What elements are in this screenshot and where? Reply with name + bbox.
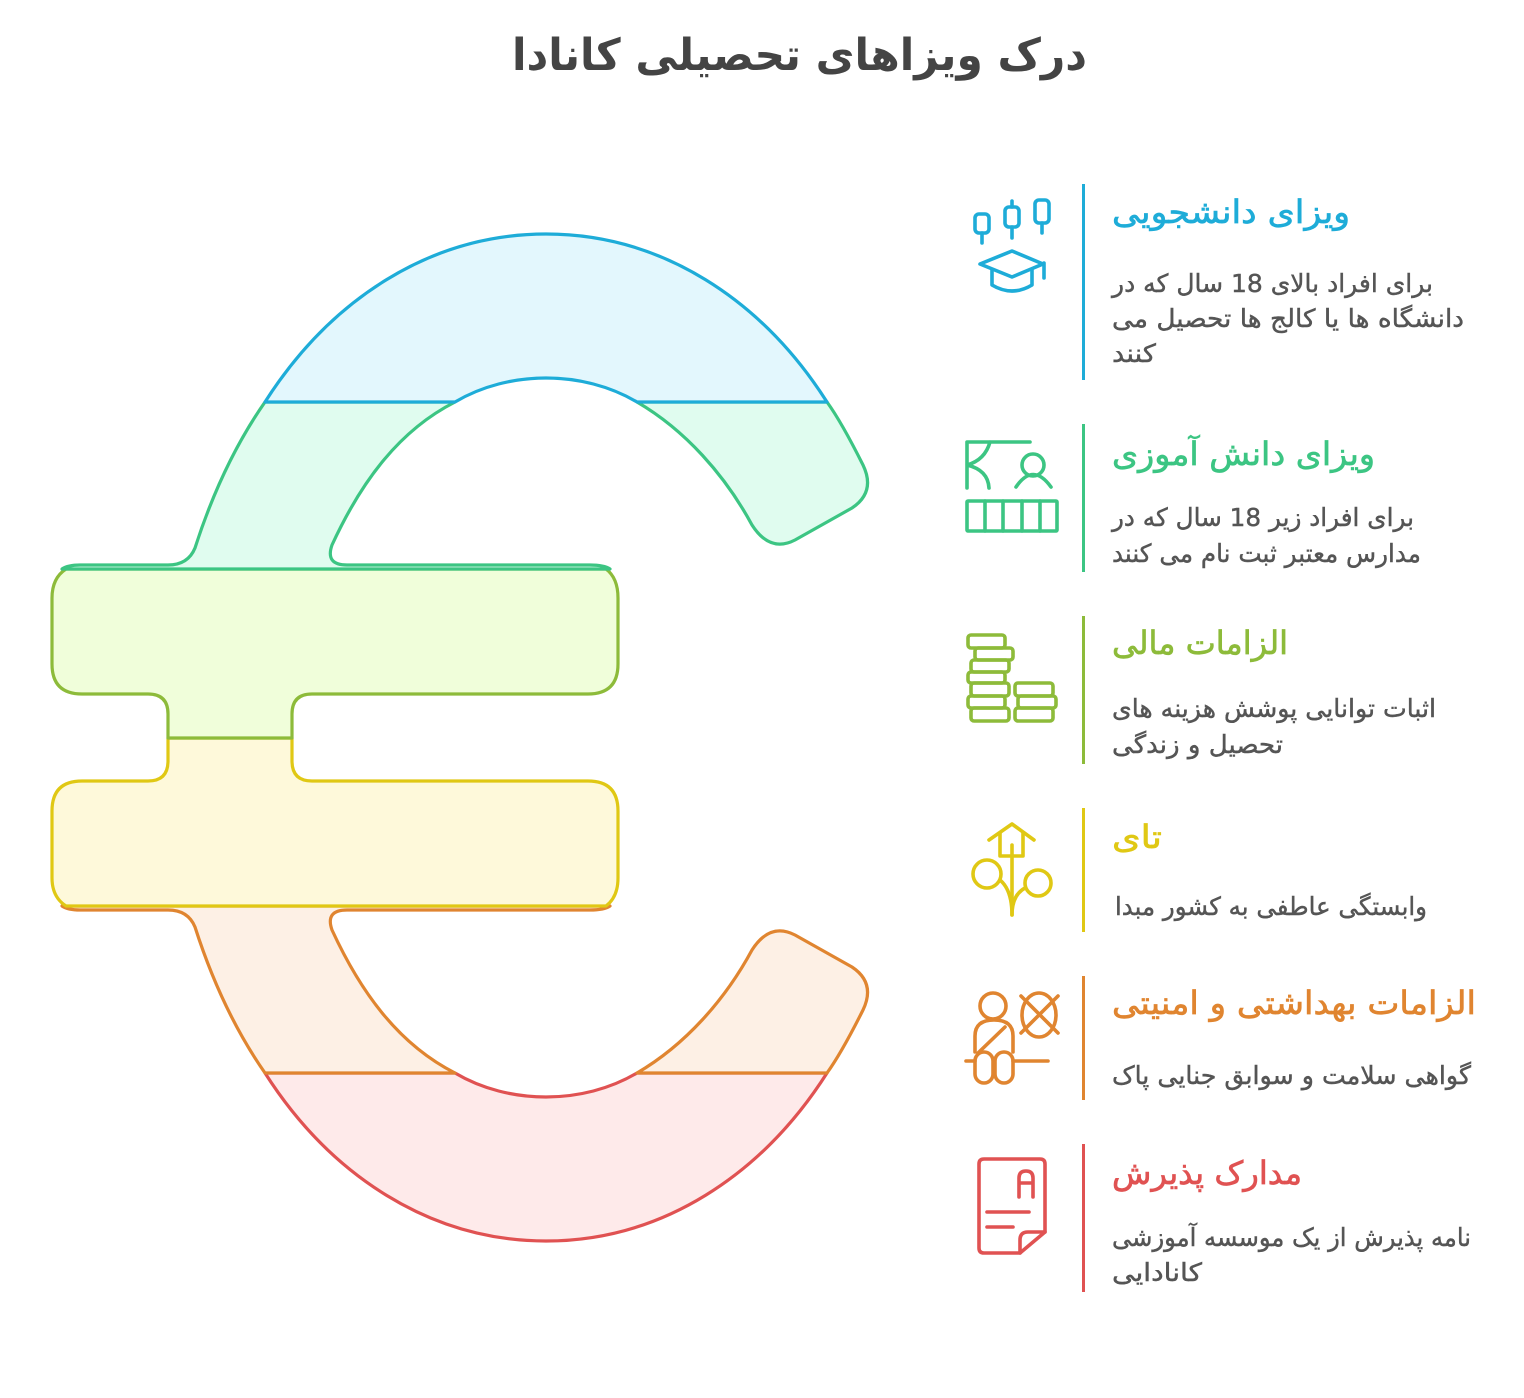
panel: school visa — [967, 424, 1421, 572]
icon: coin stacks — [968, 635, 1056, 721]
text: student visa description: کنند — [1112, 339, 1156, 368]
text: school visa description — [1110, 503, 1421, 568]
icon: seated person with crossed circle — [966, 993, 1058, 1083]
euro segment: admission documents (red) — [265, 1073, 827, 1241]
euro segment: health and security (orange) — [62, 906, 868, 1073]
panel: health and security requirements — [966, 976, 1476, 1100]
divider: financial requirements — [1082, 616, 1085, 764]
text: school visa description: برای افراد زیر 18 سال که در — [1110, 503, 1414, 532]
euro segment: financial requirements (lime) — [52, 569, 618, 738]
heading: admission documents: مدارک پذیرش — [1112, 1154, 1302, 1192]
icon: house on branching tree — [973, 824, 1051, 915]
text: ties description: وابستگی عاطفی به کشور مبدا — [1115, 892, 1427, 922]
divider: health and security — [1082, 976, 1085, 1100]
text: student visa description — [1110, 269, 1464, 368]
icon: graded document — [979, 1159, 1045, 1253]
euro segment: school visa (green) — [62, 402, 868, 569]
divider: admission documents — [1082, 1144, 1085, 1292]
icon: candlesticks and graduation cap — [975, 200, 1049, 291]
heading: financial requirements: الزامات مالی — [1112, 624, 1288, 662]
divider: school visa — [1082, 424, 1085, 572]
euro segment: student visa (blue) — [265, 234, 827, 402]
text: financial requirements description — [1112, 694, 1436, 760]
icon: classroom with student — [967, 442, 1057, 531]
heading: school visa: ویزای دانش آموزی — [1112, 434, 1375, 473]
text: school visa description: مدارس معتبر ثبت نام می کنند — [1112, 539, 1421, 568]
text: health and security description: گواهی سلامت و سوابق جنایی پاک — [1112, 1061, 1471, 1091]
euro segment: ties (yellow) — [52, 738, 618, 906]
title: درک ویزاهای تحصیلی کانادا — [512, 30, 1087, 81]
divider: student visa — [1082, 184, 1085, 380]
text: student visa description: دانشگاه ها یا کالج ها تحصیل می — [1112, 304, 1464, 334]
heading: ties: تای — [1112, 818, 1162, 856]
text: student visa description: برای افراد بالای 18 سال که در — [1110, 269, 1433, 298]
text: financial requirements description: تحصیل و زندگی — [1112, 730, 1283, 760]
heading: student visa: ویزای دانشجویی — [1112, 193, 1350, 231]
divider: ties — [1082, 808, 1085, 932]
heading: health and security: الزامات بهداشتی و امنیتی — [1112, 984, 1476, 1022]
panel: financial requirements — [968, 616, 1436, 764]
panel: ties — [973, 808, 1427, 932]
text: admission documents description: نامه پذیرش از یک موسسه آموزشی — [1112, 1222, 1471, 1252]
text: admission documents description: کانادایی — [1112, 1258, 1202, 1287]
panel: student visa — [975, 184, 1464, 380]
text: financial requirements description: اثبات توانایی پوشش هزینه های — [1112, 694, 1436, 723]
euro symbol chart — [52, 234, 868, 1241]
panel: admission documents — [979, 1144, 1471, 1292]
text: admission documents description — [1112, 1222, 1471, 1287]
